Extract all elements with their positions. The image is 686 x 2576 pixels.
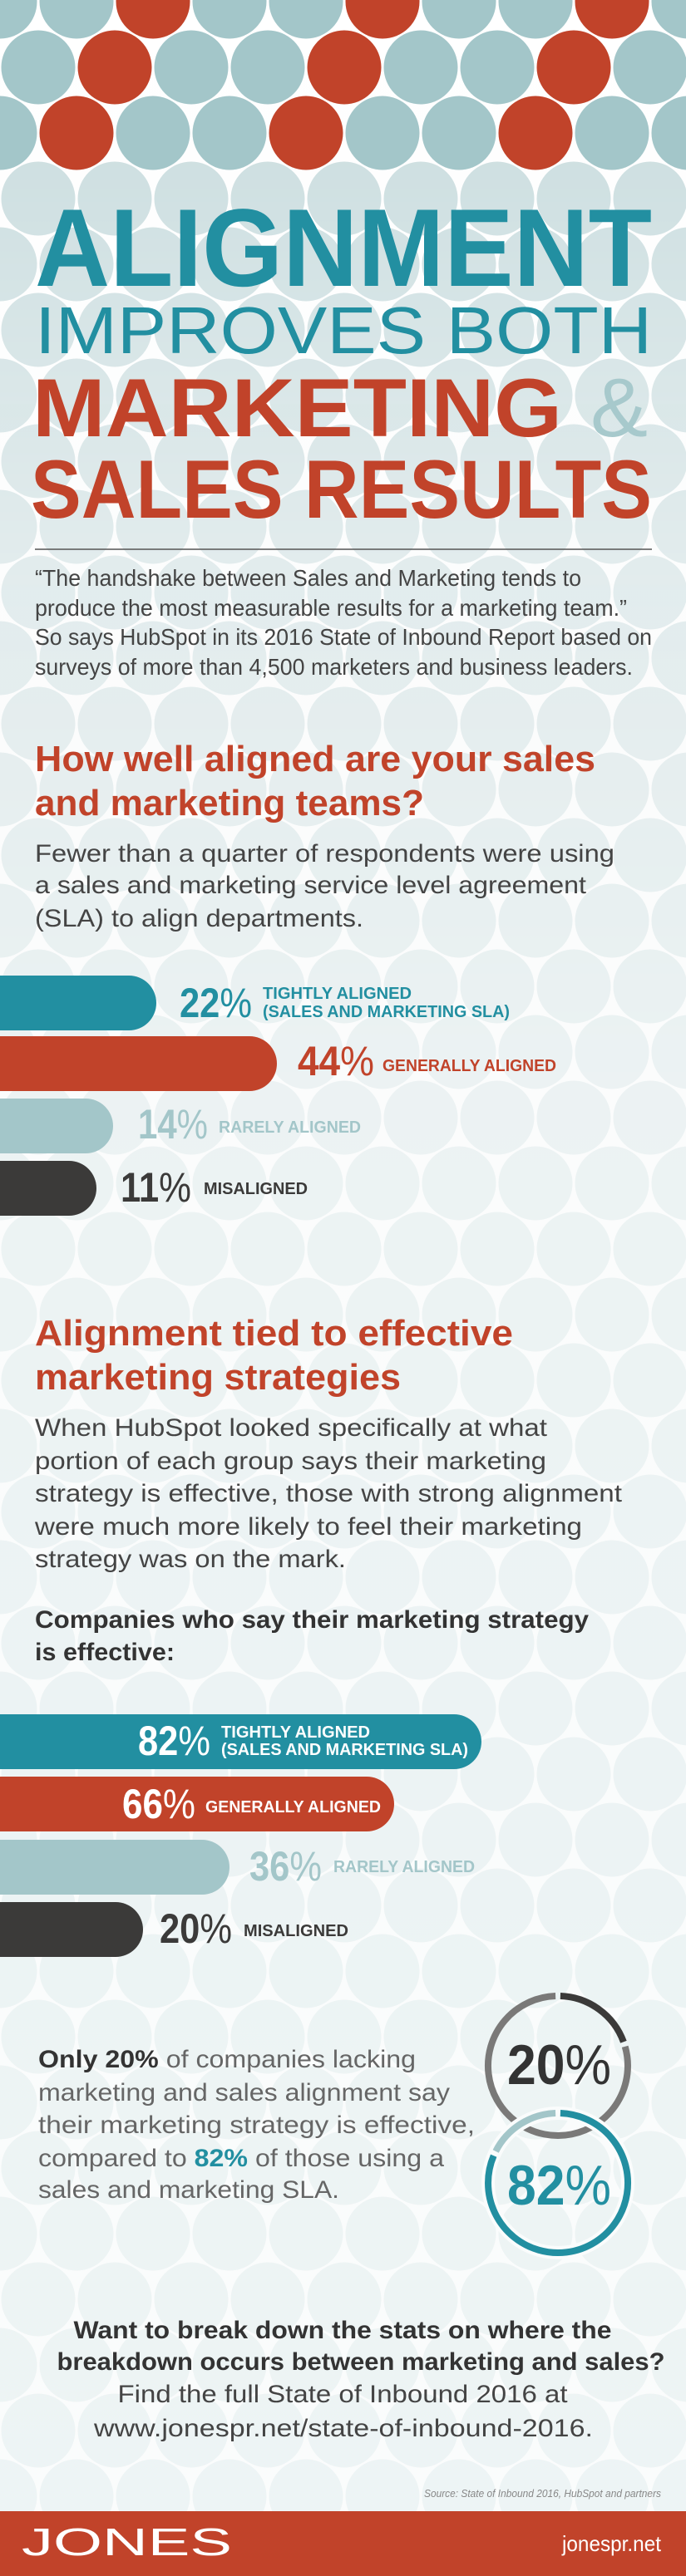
bar chart: alignment levels: 11% bbox=[121, 1164, 191, 1211]
callout: 20% vs 82% bbox=[38, 2046, 475, 2204]
title: SALES RESULTS bbox=[31, 443, 652, 535]
title: ALIGNMENT bbox=[35, 187, 652, 310]
footer url: jonespr.net bbox=[561, 2531, 662, 2556]
bar chart: effective strategy bbox=[0, 1714, 481, 1957]
bar chart: effective strategy: GENERALLY ALIGNED bbox=[205, 1798, 381, 1816]
bar chart: alignment levels: GENERALLY ALIGNED bbox=[382, 1057, 556, 1075]
call to action bbox=[57, 2317, 665, 2442]
call to action: breakdown occurs between marketing and sales? bbox=[57, 2348, 665, 2376]
paragraph: HubSpot findings: were much more likely to feel their marketing bbox=[34, 1513, 582, 1541]
bar chart: alignment levels: 14% bbox=[138, 1101, 208, 1148]
bar chart: alignment levels: (SALES AND MARKETING SLA) bbox=[263, 1003, 510, 1021]
paragraph: HubSpot findings: strategy is effective, those with strong alignment bbox=[35, 1480, 623, 1507]
heading: how well aligned: and marketing teams? bbox=[35, 783, 424, 823]
bar chart: effective strategy: (SALES AND MARKETING SLA) bbox=[221, 1741, 468, 1759]
donut: 20% bbox=[488, 1996, 628, 2136]
heading: alignment tied to strategies: Alignment tied to effective bbox=[35, 1313, 513, 1354]
bar chart: effective strategy: TIGHTLY ALIGNED bbox=[221, 1723, 370, 1742]
paragraph: SLA usage: a sales and marketing service level agreement bbox=[35, 872, 587, 899]
bar chart: effective strategy: RARELY ALIGNED bbox=[333, 1858, 475, 1876]
call to action: Find the full State of Inbound 2016 at bbox=[118, 2381, 568, 2408]
intro quote: So says HubSpot in its 2016 State of Inbound Report based on bbox=[35, 624, 652, 650]
heading: alignment tied to strategies: marketing strategies bbox=[35, 1357, 401, 1398]
donut: 82%: 82% bbox=[507, 2154, 611, 2217]
subheading: companies effective: is effective: bbox=[35, 1639, 175, 1666]
subheading: companies effective bbox=[35, 1606, 589, 1666]
heading: alignment tied to strategies bbox=[35, 1313, 513, 1398]
donut: 82% bbox=[488, 2113, 628, 2253]
title: & bbox=[590, 361, 648, 455]
paragraph: HubSpot findings: strategy was on the mark. bbox=[35, 1546, 346, 1573]
paragraph: SLA usage: Fewer than a quarter of respondents were using bbox=[35, 840, 614, 868]
paragraph: HubSpot findings: portion of each group says their marketing bbox=[35, 1448, 546, 1475]
paragraph: SLA usage: (SLA) to align departments. bbox=[35, 905, 363, 932]
bar chart: alignment levels: 22% bbox=[180, 980, 252, 1026]
callout: 20% vs 82%: compared to 82% of those using a bbox=[38, 2145, 444, 2172]
bar chart: effective strategy: 66% bbox=[122, 1781, 195, 1827]
callout: 20% vs 82%: Only 20% of companies lacking bbox=[38, 2046, 416, 2073]
callout: 20% vs 82%: sales and marketing SLA. bbox=[38, 2176, 339, 2204]
subheading: companies effective: Companies who say their marketing strategy bbox=[35, 1606, 589, 1634]
intro quote bbox=[35, 565, 652, 680]
bar chart: alignment levels: RARELY ALIGNED bbox=[219, 1118, 361, 1137]
call to action: Want to break down the stats on where the bbox=[73, 2317, 612, 2344]
bar chart: alignment levels bbox=[0, 976, 556, 1216]
donut: 20%: 20% bbox=[507, 2033, 611, 2097]
paragraph: HubSpot findings: When HubSpot looked specifically at what bbox=[35, 1414, 548, 1442]
intro quote: produce the most measurable results for a marketing team.” bbox=[35, 595, 627, 621]
bar chart: effective strategy: 82% bbox=[138, 1718, 210, 1764]
bar chart: effective strategy: MISALIGNED bbox=[244, 1922, 348, 1940]
intro quote: surveys of more than 4,500 marketers and business leaders. bbox=[35, 654, 633, 680]
title bbox=[31, 187, 652, 535]
paragraph: SLA usage bbox=[35, 840, 614, 932]
bar chart: alignment levels: MISALIGNED bbox=[204, 1180, 308, 1198]
heading: how well aligned bbox=[35, 739, 595, 823]
paragraph: HubSpot findings bbox=[34, 1414, 623, 1573]
source note: Source: State of Inbound 2016, HubSpot and partners bbox=[424, 2487, 661, 2500]
call to action: www.jonespr.net/state-of-inbound-2016. bbox=[93, 2415, 593, 2442]
bar chart: effective strategy: 20% bbox=[160, 1905, 232, 1952]
bar chart: alignment levels: 44% bbox=[298, 1038, 374, 1084]
logo: JONES: JONES bbox=[22, 2520, 232, 2564]
intro quote: “The handshake between Sales and Marketing tends to bbox=[35, 565, 581, 591]
callout: 20% vs 82%: marketing and sales alignment say bbox=[38, 2079, 450, 2107]
title: MARKETING bbox=[32, 361, 562, 454]
bar chart: effective strategy: 36% bbox=[249, 1843, 322, 1890]
heading: how well aligned: How well aligned are your sales bbox=[35, 739, 595, 779]
bar chart: alignment levels: TIGHTLY ALIGNED bbox=[263, 985, 412, 1003]
footer bbox=[0, 2511, 686, 2576]
callout: 20% vs 82%: their marketing strategy is effective, bbox=[38, 2111, 475, 2139]
title: IMPROVES BOTH bbox=[35, 293, 652, 367]
header circle pattern bbox=[0, 0, 686, 170]
